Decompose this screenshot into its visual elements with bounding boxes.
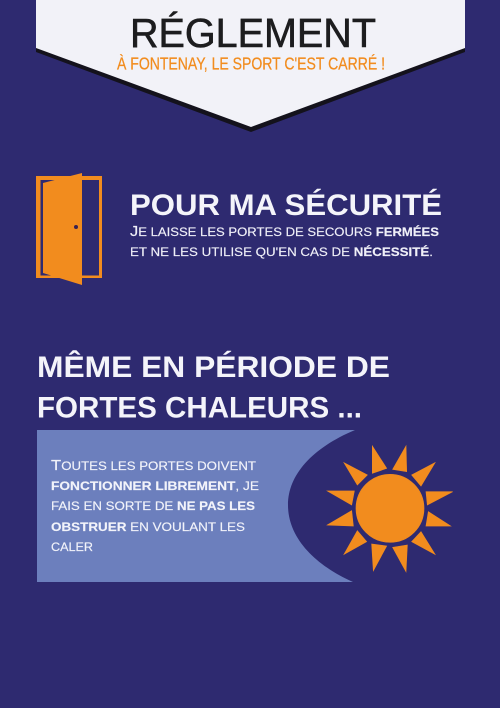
heat heading xyxy=(37,350,390,424)
panel text: FAIS EN SORTE DE NE PAS LES xyxy=(51,501,255,513)
safety text xyxy=(130,224,439,259)
icon: sun xyxy=(327,446,453,572)
panel text: CALER xyxy=(51,542,93,554)
panel text xyxy=(51,458,259,554)
subtitle: À FONTENAY, LE SPORT C'EST CARRÉ ! xyxy=(117,54,385,74)
title: RÉGLEMENT xyxy=(130,10,376,56)
panel text: OBSTRUER EN VOULANT LES xyxy=(51,522,245,534)
section: safety xyxy=(130,188,442,259)
icon: open door xyxy=(36,173,102,285)
safety text: ET NE LES UTILISE QU'EN CAS DE NÉCESSITÉ . xyxy=(130,246,433,259)
heat heading: FORTES CHALEURS ... xyxy=(37,392,362,424)
panel: heat advice xyxy=(37,430,355,582)
safety text: JE LAISSE LES PORTES DE SECOURS FERMÉES xyxy=(130,224,439,240)
header banner xyxy=(36,0,465,132)
safety heading: POUR MA SÉCURITÉ xyxy=(130,188,442,222)
heat heading: MÊME EN PÉRIODE DE xyxy=(37,350,390,384)
panel text: FONCTIONNER LIBREMENT , JE xyxy=(51,481,259,493)
panel text: TOUTES LES PORTES DOIVENT xyxy=(51,458,256,474)
